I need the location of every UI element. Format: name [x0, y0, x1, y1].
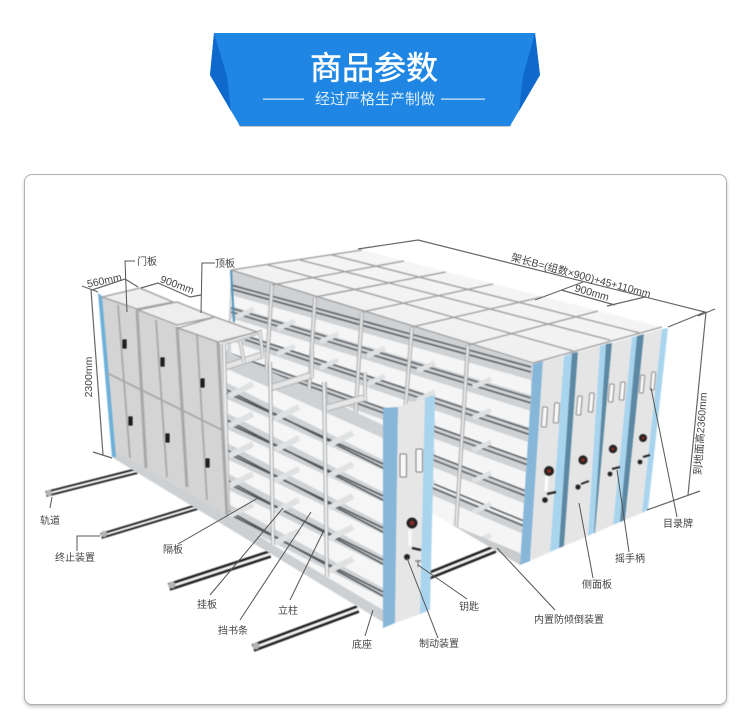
label: key: 钥匙 — [459, 600, 479, 613]
label: hanging plate: 挂板 — [197, 598, 217, 611]
label: side panel: 侧面板 — [582, 578, 612, 591]
label: hanging plate — [197, 508, 283, 611]
label: upright — [278, 530, 324, 617]
top brackets — [222, 332, 367, 408]
dimension: rack length — [358, 240, 715, 327]
label: upright: 立柱 — [278, 604, 298, 617]
heading: product parameters: 商品参数 — [310, 50, 438, 86]
dimension: section width 900mm — [535, 282, 645, 306]
front uprights — [224, 344, 327, 577]
open shelves — [222, 332, 383, 627]
label: rail: 轨道 — [40, 514, 60, 527]
header banner — [210, 33, 540, 127]
dimension: height 2300mm — [83, 290, 112, 458]
panel: product diagram frame — [24, 174, 727, 705]
label: directory card — [651, 388, 693, 530]
dimension: cabinet depth 560mm: 560mm — [86, 272, 123, 291]
rail 1 — [46, 471, 137, 496]
uprights — [264, 285, 468, 528]
dimension: cabinet width 900mm — [141, 274, 201, 297]
hanging plates — [236, 309, 491, 543]
dimension: rack length: 架长B=(组数×900)+45+110mm — [510, 251, 652, 301]
subheading with side rules: 经过严格生产制做 — [315, 91, 435, 108]
label: directory card: 目录牌 — [663, 517, 693, 530]
label: side panel — [579, 503, 612, 591]
label: crank handle — [615, 470, 645, 565]
label: door panel — [125, 255, 157, 312]
rear top surface with grid — [231, 250, 662, 363]
rear base — [456, 526, 520, 564]
dimension: cabinet depth 560mm — [82, 272, 138, 292]
rear left blue edge — [230, 270, 235, 322]
dimension: section width 900mm: 900mm — [573, 283, 611, 304]
side panel 4 — [625, 328, 668, 520]
rear shelves face — [225, 270, 533, 570]
label: anti-tilt device — [497, 548, 604, 626]
label: crank handle: 摇手柄 — [615, 552, 645, 565]
rail 2 — [101, 507, 197, 537]
rails — [46, 471, 495, 650]
side panel 3 — [595, 334, 644, 533]
label: brake device — [407, 558, 459, 650]
dimension: cabinet width 900mm: 900mm — [159, 274, 196, 297]
label: anti-tilt device: 内置防倾倒装置 — [534, 613, 604, 626]
label: base: 底座 — [352, 638, 372, 651]
label: key — [418, 565, 479, 613]
label: shelf board: 隔板 — [163, 543, 183, 556]
label: door panel: 门板 — [137, 255, 157, 268]
side panel 2 — [564, 343, 612, 546]
label: top panel: 顶板 — [215, 257, 235, 270]
base plinth — [113, 447, 383, 622]
front end panel — [383, 395, 435, 628]
label: top panel — [201, 257, 235, 313]
shelf boards — [231, 295, 531, 560]
cabinet tops — [102, 288, 257, 342]
dimension: total height 2360mm — [647, 312, 710, 510]
label: book stop strip — [218, 512, 311, 637]
label: stop device — [55, 536, 100, 564]
rails on shelves — [231, 285, 531, 529]
door locks — [122, 339, 210, 468]
side panel 1 — [520, 352, 578, 565]
label: base — [352, 610, 373, 651]
door divisions — [107, 305, 222, 500]
rail 4 — [252, 609, 358, 650]
dimension: total height 2360mm: 到地面高2360mm — [691, 392, 710, 476]
rail 3 — [168, 554, 270, 589]
label: brake device: 制动装置 — [419, 637, 459, 650]
rail 5 — [428, 549, 495, 576]
label: rail — [40, 497, 60, 527]
cabinet section — [98, 288, 257, 516]
label: stop device: 终止装置 — [55, 551, 95, 564]
diagram and header canvas — [40, 33, 716, 652]
dimension: height 2300mm: 2300mm — [83, 356, 95, 397]
label: shelf board — [163, 498, 258, 556]
label: book stop strip: 挡书条 — [218, 624, 248, 637]
front shelving block — [98, 288, 435, 628]
rear shelving block — [225, 250, 668, 570]
